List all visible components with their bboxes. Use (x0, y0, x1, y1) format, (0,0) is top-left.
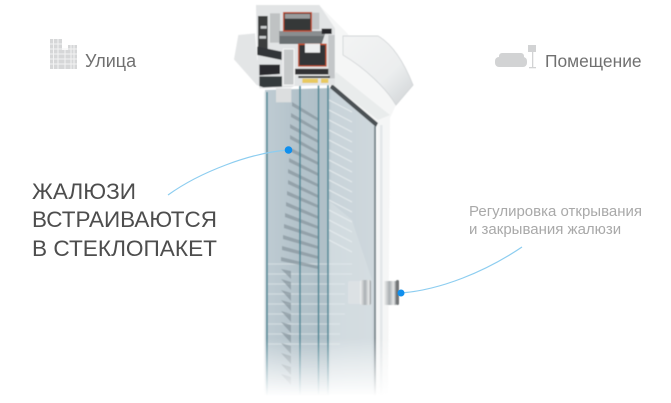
frame cross-section (234, 5, 335, 102)
glass pane edges (267, 80, 328, 395)
blind slats, section view (281, 102, 318, 385)
callout: handle pointer (398, 247, 522, 296)
left outer profile (234, 33, 283, 87)
window frame side (320, 6, 396, 395)
glass unit with blinds (264, 80, 378, 395)
callout: blinds pointer (168, 146, 292, 195)
outer hood (343, 36, 413, 105)
indoor handle (348, 280, 399, 305)
blind slats, front view (268, 100, 352, 344)
label: street: Улица (85, 51, 137, 71)
thermal chambers (258, 16, 268, 50)
bottom fade (255, 338, 400, 403)
heading: blinds in glass unit: ЖАЛЮЗИ (32, 179, 136, 204)
light diagonal glass reflection (328, 200, 372, 395)
heading: blinds in glass unit (32, 179, 217, 261)
callout text: blind adjustment: и закрывания жалюзи (469, 221, 621, 238)
callout text: blind adjustment (469, 203, 642, 238)
callout text: blind adjustment: Регулировка открывания (469, 203, 642, 220)
heading: blinds in glass unit: ВСТРАИВАЮТСЯ (32, 207, 217, 232)
window illustration (234, 5, 413, 403)
icon: city buildings (50, 39, 77, 69)
label: room: Помещение (545, 51, 642, 71)
main profile body (256, 5, 335, 88)
heading: blinds in glass unit: В СТЕКЛОПАКЕТ (32, 236, 217, 261)
icon: sofa and lamp (495, 45, 536, 68)
